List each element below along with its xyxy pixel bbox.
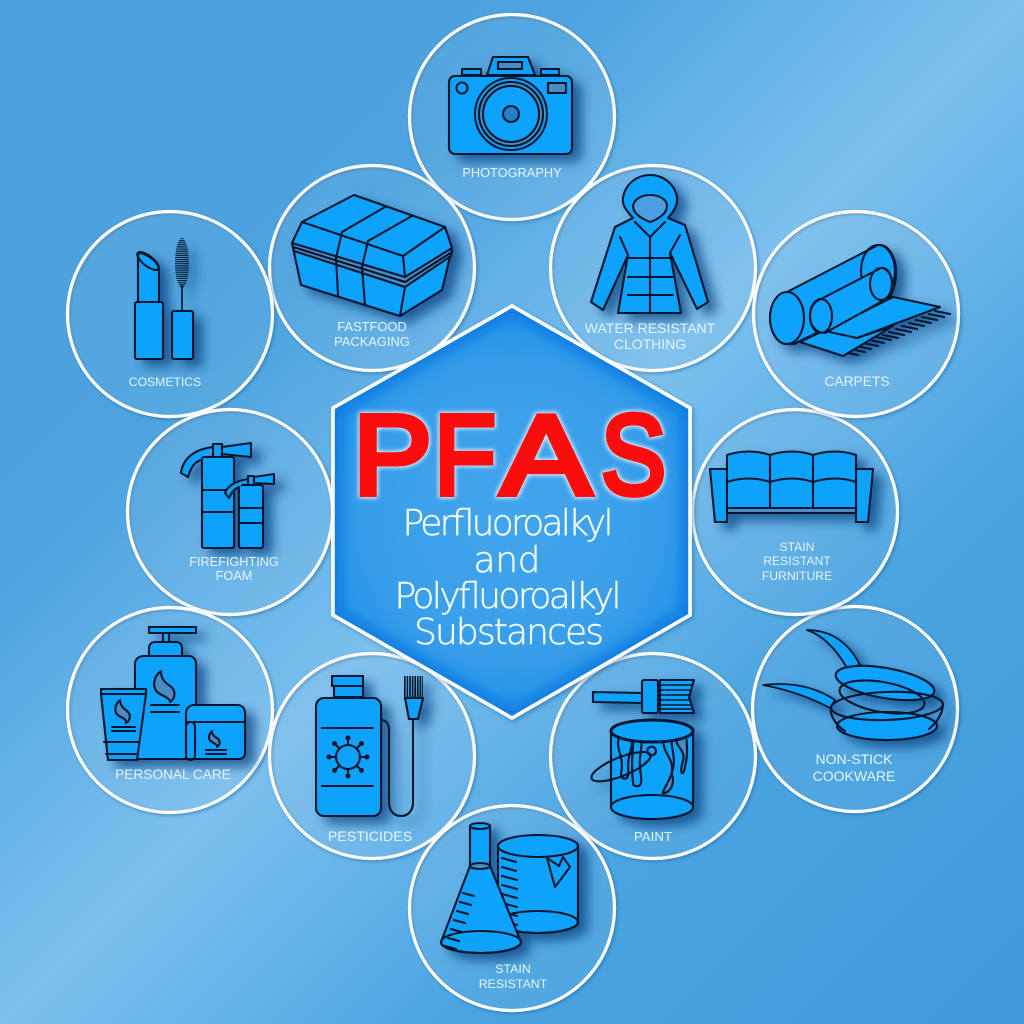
label: FASTFOOD (337, 319, 407, 334)
label: PHOTOGRAPHY (462, 165, 562, 180)
icon: paint can and brush (588, 680, 694, 819)
panel: cosmetics (68, 212, 272, 416)
subtitle (394, 503, 622, 653)
label: FURNITURE (762, 569, 832, 583)
icon: lipstick and mascara (135, 238, 193, 359)
panel: water resistant clothing (550, 166, 756, 370)
panel: stain resistant furniture (692, 410, 898, 614)
label: PESTICIDES (328, 829, 412, 845)
panel: firefighting foam (128, 410, 332, 614)
panel: pesticides (270, 654, 474, 858)
title: PFAS: P (353, 392, 432, 518)
label: RESISTANT (763, 554, 831, 568)
title: PFAS: F (434, 392, 496, 518)
subtitle: Perfluoroalkyl (402, 503, 614, 544)
panel: central hexagon (333, 306, 690, 718)
subtitle: Substances (414, 612, 604, 653)
panel: fastfood packaging (270, 166, 474, 370)
label: FOAM (216, 569, 252, 583)
subtitle: Polyfluoroalkyl (394, 576, 622, 617)
label: STAIN (780, 540, 814, 554)
label: RESISTANT (479, 977, 548, 991)
panel: personal care (68, 608, 272, 812)
icon: bottles (101, 627, 245, 760)
label: CARPETS (824, 374, 890, 389)
panel: photography (410, 14, 614, 220)
panel: paint (550, 654, 756, 858)
title: PFAS (353, 392, 666, 518)
panel: carpets (754, 212, 958, 416)
label: PACKAGING (334, 334, 410, 349)
icon: jacket (591, 175, 708, 313)
icon: camera (449, 57, 572, 154)
label: CLOTHING (614, 336, 686, 352)
panel: non-stick cookware (752, 606, 958, 812)
label: PAINT (634, 829, 672, 844)
label: NON-STICK (816, 751, 893, 767)
icon: sofa (710, 452, 873, 522)
label: COSMETICS (129, 375, 201, 389)
label: PERSONAL CARE (115, 767, 231, 782)
label: WATER RESISTANT (585, 320, 716, 336)
subtitle: and (474, 540, 540, 581)
icon: frying pans (763, 630, 943, 740)
label: COOKWARE (813, 768, 895, 784)
icon: sprayer bottle (316, 676, 423, 816)
label: STAIN (495, 962, 531, 976)
title: PFAS: A (501, 392, 592, 518)
panel: stain resistant (410, 806, 614, 1010)
icon: beaker and flask (441, 823, 578, 953)
icon: fire extinguishers (181, 443, 274, 548)
label: FIREFIGHTING (189, 555, 279, 569)
icon: rolled carpet (770, 245, 950, 356)
icon: food box (292, 195, 452, 316)
title: PFAS: S (601, 392, 666, 518)
